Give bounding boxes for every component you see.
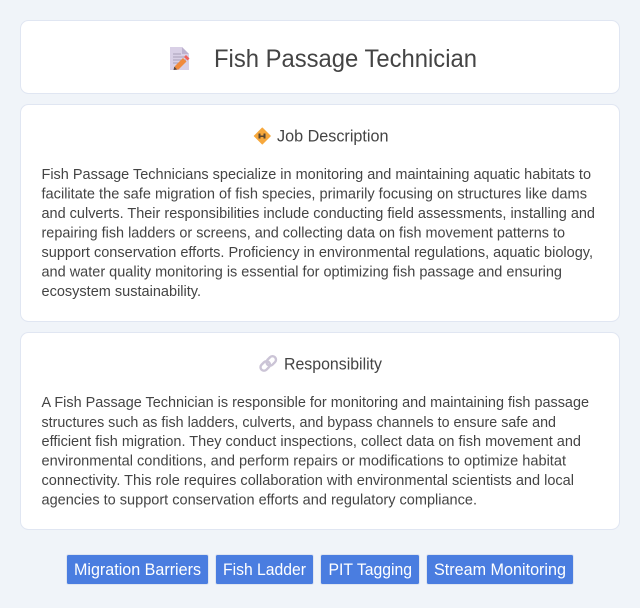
tag: pit tagging: PIT Tagging [328, 560, 412, 579]
text block: job description: and culverts. Their responsibilities include conducting field assessments, installing and [42, 206, 595, 222]
text block: responsibility [42, 395, 589, 508]
tag: fish ladder [216, 554, 314, 584]
tag row [66, 554, 574, 584]
tag: stream monitoring: Stream Monitoring [434, 560, 566, 579]
panel: responsibility [20, 332, 620, 530]
tag: fish ladder: Fish Ladder [223, 560, 306, 579]
icon: chain link [259, 355, 277, 372]
text block: job description: ecosystem sustainability. [42, 284, 201, 300]
tag: migration barriers: Migration Barriers [74, 560, 201, 579]
text block: responsibility: connectivity. This role requires collaboration with environmental scientists and local [42, 473, 574, 489]
tag: pit tagging [320, 554, 420, 584]
heading: job description: Job Description [277, 126, 388, 146]
tag: migration barriers [66, 554, 208, 584]
text block: job description: facilitate the safe migration of fish species, primarily focusing on structures like dams [42, 186, 587, 202]
text block: responsibility: A Fish Passage Technician is responsible for monitoring and maintaining fish passage [42, 395, 589, 411]
panel: job description [20, 104, 620, 322]
title: Fish Passage Technician [214, 46, 477, 73]
panel: title card [20, 20, 620, 94]
text block: job description [42, 167, 595, 300]
text block: responsibility: environmental conditions, and perform repairs or modifications to optimize habitat [42, 453, 566, 469]
text block: responsibility: structures such as fish ladders, culverts, and bypass channels to ensure safe and [42, 415, 556, 431]
tag: stream monitoring [426, 554, 574, 584]
heading: responsibility: Responsibility [284, 354, 383, 374]
text block: job description: repairing fish ladders or screens, and collecting data on fish movement patterns to [42, 225, 565, 241]
text block: job description: support conservation efforts. Proficiency in environmental regulations, aquatic biology, [42, 245, 593, 261]
text block: responsibility: efficient fish migration. They conduct inspections, collect data on fish movement and [42, 434, 581, 450]
text block: job description: and water quality monitoring is essential for optimizing fish passage and ensuring [42, 264, 562, 280]
text block: responsibility: agencies to support conservation efforts and regulatory compliance. [42, 492, 477, 508]
icon: orange diamond sign [254, 128, 270, 144]
icon: document with pencil [170, 47, 190, 70]
text block: job description: Fish Passage Technicians specialize in monitoring and maintaining aquatic habitats to [42, 167, 591, 183]
